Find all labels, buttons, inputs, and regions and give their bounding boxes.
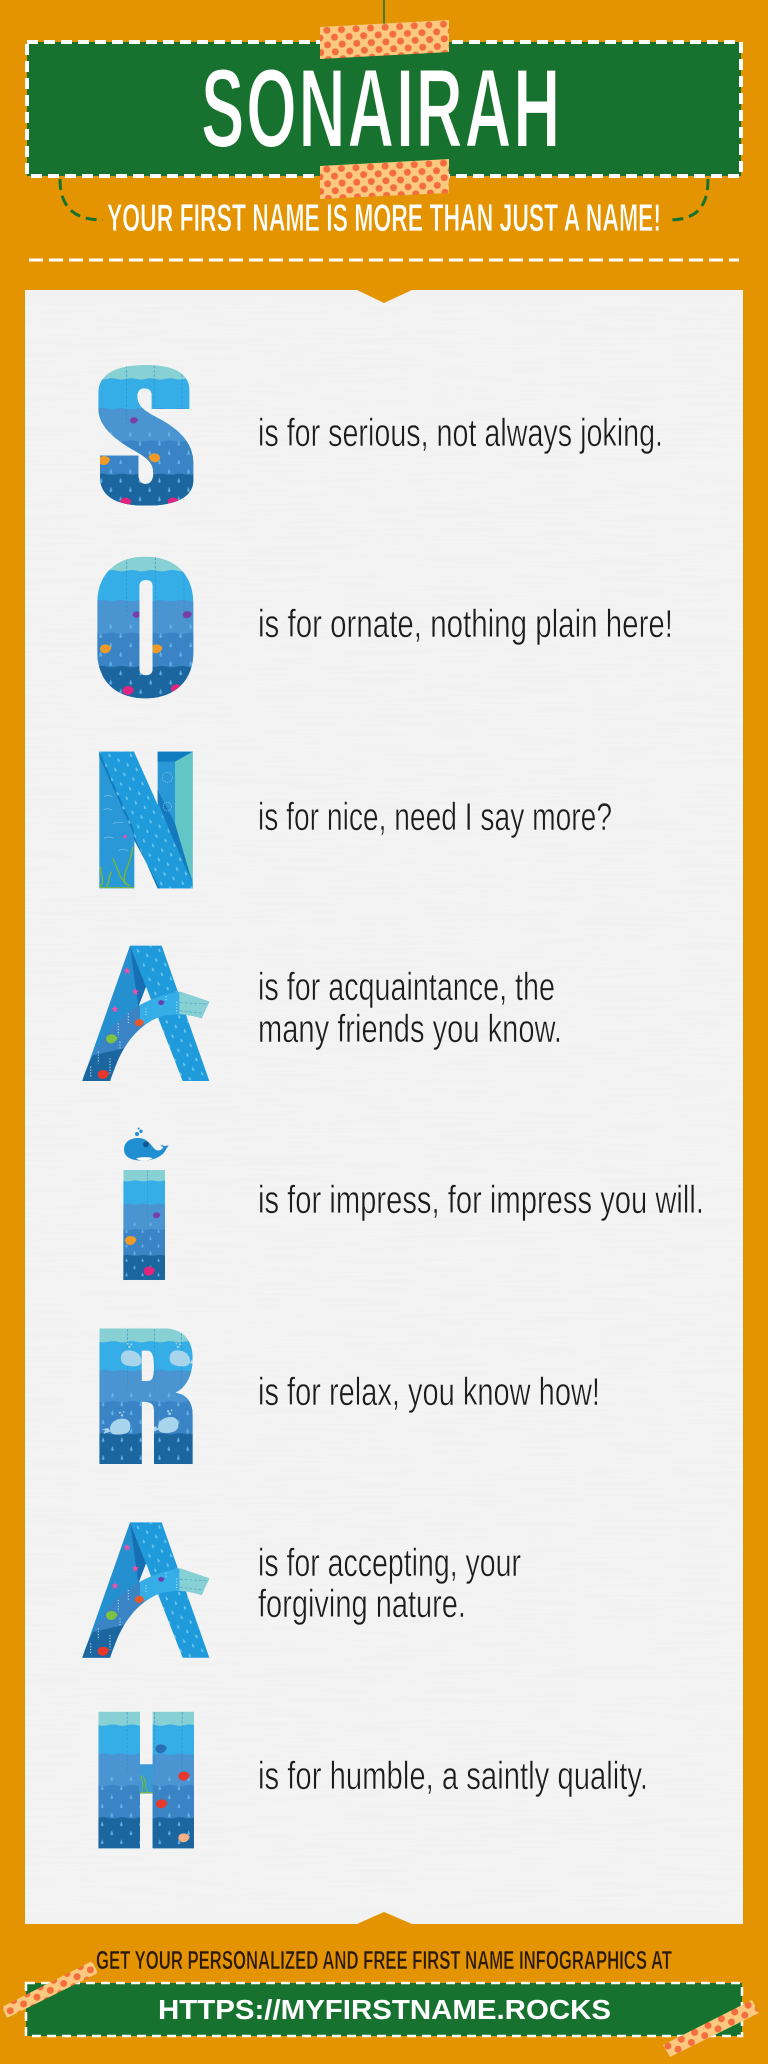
text: second A lines: is for accepting, your <box>258 1542 521 1585</box>
washi tape: footer left <box>2 1961 98 2018</box>
icon: whale <box>124 1128 169 1161</box>
letter I illustration <box>123 1170 203 1280</box>
title banner <box>27 42 741 176</box>
washi tape: footer right <box>663 2000 759 2057</box>
left dashed bracket <box>60 179 103 220</box>
letter O illustration <box>97 557 197 698</box>
letter N illustration <box>99 752 193 888</box>
letter S illustration <box>97 365 194 507</box>
letter H illustration <box>98 1712 194 1848</box>
text: first A lines: many friends you know. <box>258 1008 562 1051</box>
letter A illustration <box>80 946 212 1083</box>
text: second A lines: forgiving nature. <box>258 1583 466 1626</box>
text: N line: is for nice, need I say more? <box>258 796 612 839</box>
second letter A illustration <box>80 1522 212 1660</box>
washi tape: top <box>320 20 449 59</box>
washi tape: bottom <box>320 159 449 199</box>
footer URL: HTTPS://MYFIRSTNAME.ROCKS <box>158 1994 611 2025</box>
text: second A lines <box>258 1542 521 1626</box>
text: first A lines: is for acquaintance, the <box>258 966 555 1009</box>
right dashed bracket <box>669 179 708 220</box>
text: R line: is for relax, you know how! <box>258 1371 600 1414</box>
text: first A lines <box>258 966 562 1051</box>
letter R illustration <box>99 1328 198 1464</box>
text: H line: is for humble, a saintly quality. <box>258 1755 648 1798</box>
footer URL banner <box>26 1983 742 2036</box>
main paper panel <box>25 290 743 1924</box>
hanging string <box>383 0 385 24</box>
